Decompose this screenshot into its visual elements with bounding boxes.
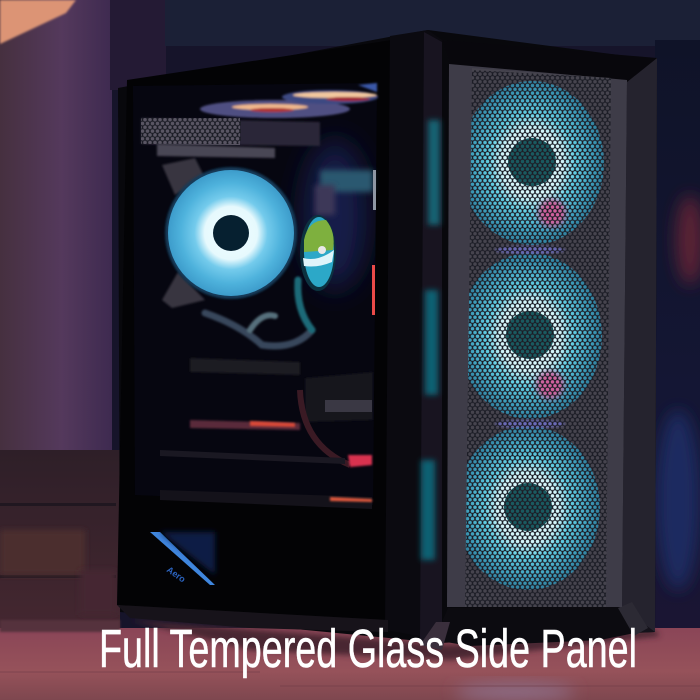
case shadow on table (130, 620, 660, 660)
interior blue haze (303, 140, 367, 290)
top fans glow (200, 83, 378, 118)
ceiling lamp glow (0, 0, 76, 44)
case side edge pillar (385, 30, 442, 640)
front mesh panel (447, 60, 627, 610)
case bottom edge (117, 605, 388, 632)
front vent LED reflections (421, 120, 440, 560)
front foot (434, 607, 640, 646)
shroud logo light (150, 532, 215, 585)
perforated top bracket (141, 118, 320, 146)
PC case (117, 30, 660, 660)
motherboard parts (320, 170, 373, 192)
brand logo: Aero (165, 564, 188, 585)
front fan middle (458, 253, 602, 419)
CPU cooler fan frame (162, 158, 205, 308)
table surface (0, 620, 700, 700)
front bezel (442, 40, 657, 640)
brick ledge (0, 450, 120, 628)
front fan bottom (456, 426, 600, 590)
case body (118, 30, 657, 643)
side glass panel (117, 40, 392, 620)
front fan top (460, 81, 604, 245)
mesh overlay (460, 60, 615, 610)
graphics card and lower parts (190, 358, 300, 375)
CPU cooler fan (165, 167, 297, 299)
cables (205, 280, 312, 346)
pump block (300, 215, 336, 291)
